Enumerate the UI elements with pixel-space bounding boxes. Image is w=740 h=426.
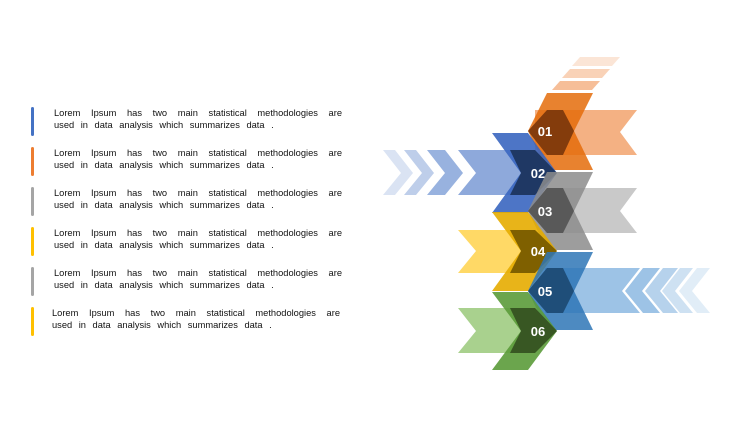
text block 5 (31, 267, 342, 296)
text block 1 (31, 107, 342, 136)
text block 4 (31, 227, 342, 256)
step 01 orange (528, 57, 637, 170)
text block 5: used in data analysis which summarizes data . (54, 280, 274, 290)
step 06 green: 06 (531, 324, 545, 339)
step 06 green (458, 292, 557, 370)
step 01 orange: 01 (538, 124, 552, 139)
text block 4: used in data analysis which summarizes data . (54, 240, 274, 250)
step 03 gray: 03 (538, 204, 552, 219)
text block 2: used in data analysis which summarizes data . (54, 160, 274, 170)
text block 1: used in data analysis which summarizes data . (54, 120, 274, 130)
step 02 blue: 02 (531, 166, 545, 181)
text block 2 (31, 147, 342, 176)
step 05 blue: 05 (538, 284, 552, 299)
text block 4: Lorem Ipsum has two main statistical methodologies are (54, 228, 342, 238)
step 04 yellow (458, 212, 557, 291)
text block 3 (31, 187, 342, 216)
step 02 blue (383, 133, 557, 213)
text block 2: Lorem Ipsum has two main statistical methodologies are (54, 148, 342, 158)
text block 1: Lorem Ipsum has two main statistical methodologies are (54, 108, 342, 118)
text block 5: Lorem Ipsum has two main statistical methodologies are (54, 268, 342, 278)
text block 6: Lorem Ipsum has two main statistical methodologies are (52, 308, 340, 318)
text block 3: Lorem Ipsum has two main statistical methodologies are (54, 188, 342, 198)
text block 3: used in data analysis which summarizes data . (54, 200, 274, 210)
text block 6: used in data analysis which summarizes data . (52, 320, 272, 330)
step 04 yellow: 04 (531, 244, 546, 259)
step 03 gray (528, 172, 637, 250)
step 05 blue (528, 252, 710, 330)
text block 6 (31, 307, 340, 336)
